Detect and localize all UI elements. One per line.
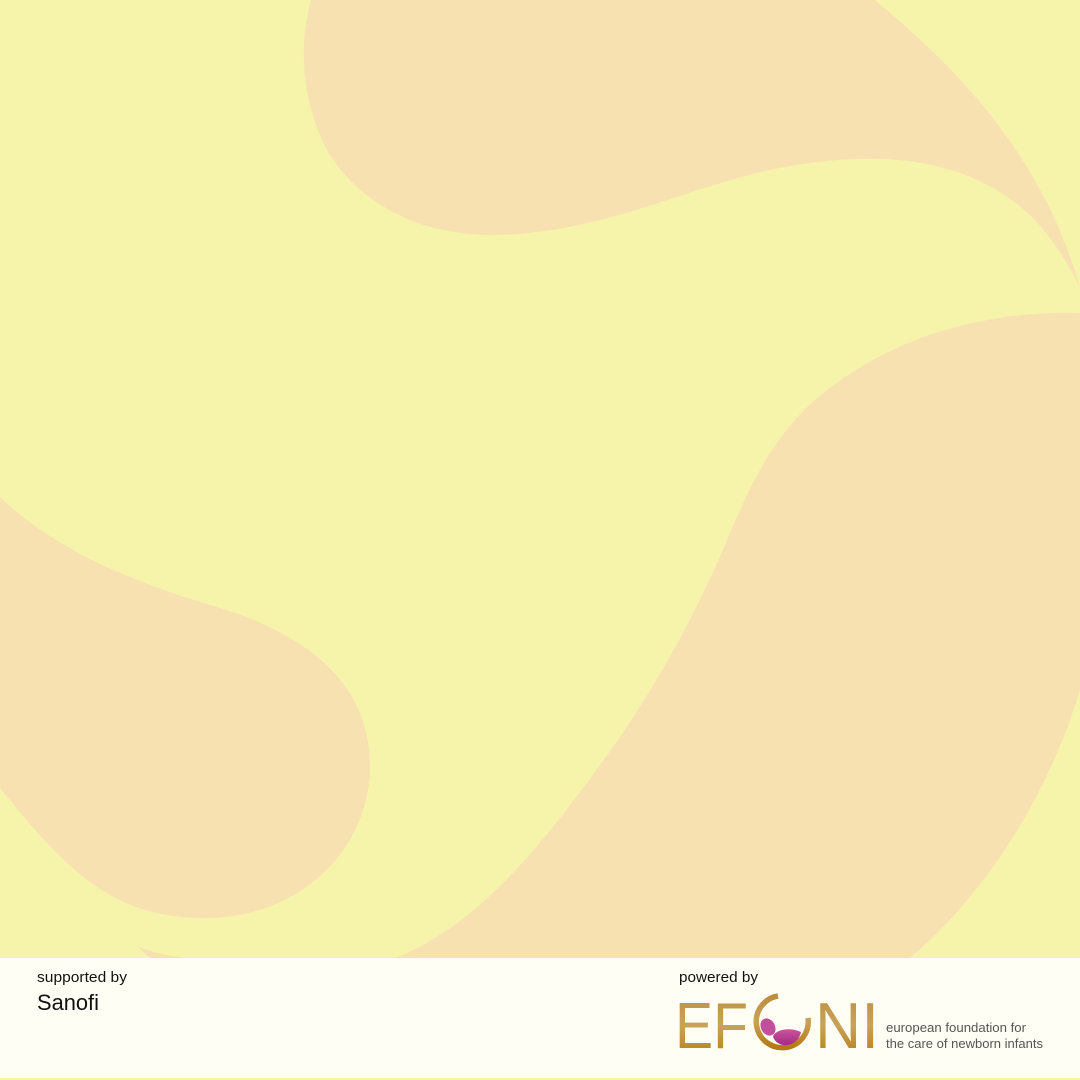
supporter credit: [37, 969, 128, 1015]
logo letters N I: NI: [815, 989, 879, 1062]
logo letters E F: EF: [675, 989, 748, 1062]
background swoosh: left: [0, 497, 370, 918]
background swoosh: small bottom sliver: [137, 946, 185, 958]
EFCNI logo: [675, 989, 879, 1062]
powered by label: powered by: [679, 969, 758, 986]
footer band: [0, 958, 1080, 1078]
EFCNI tagline: the care of newborn infants: [886, 1037, 1043, 1051]
logo C with baby: [756, 996, 808, 1048]
EFCNI tagline: european foundation for: [886, 1021, 1026, 1035]
background swoosh: right: [395, 313, 1080, 958]
supporter credit: supported by: [37, 969, 128, 986]
supporter credit: Sanofi: [37, 990, 99, 1015]
background swoosh: top: [304, 0, 1080, 288]
EFCNI tagline: [886, 1021, 1043, 1051]
